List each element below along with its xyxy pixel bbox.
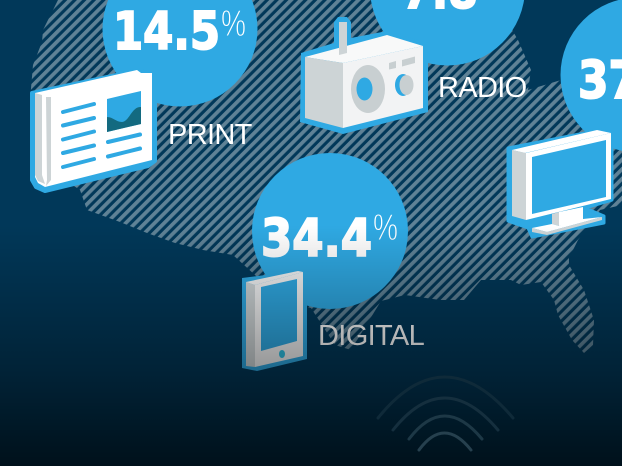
label: digital: DIGITAL <box>318 320 425 352</box>
circle: television share <box>560 0 622 152</box>
bottom fade overlay <box>0 225 622 466</box>
icon: newspaper <box>32 70 155 191</box>
circle: digital share <box>252 153 408 309</box>
icon: radio <box>300 17 428 134</box>
circle: print share <box>102 0 258 106</box>
circle: print share: 14.5 <box>113 2 220 62</box>
circle: digital share: 34.4 <box>261 209 372 269</box>
label: radio: RADIO <box>438 72 527 104</box>
circle: digital share: % <box>373 207 398 248</box>
label: print: PRINT <box>168 119 253 151</box>
icon: tablet <box>242 271 307 371</box>
icon: wifi signal <box>378 377 513 450</box>
map of the United States <box>30 0 622 353</box>
icon: television <box>508 130 612 237</box>
circle: print share: % <box>221 3 246 44</box>
circle: radio share <box>370 0 525 66</box>
